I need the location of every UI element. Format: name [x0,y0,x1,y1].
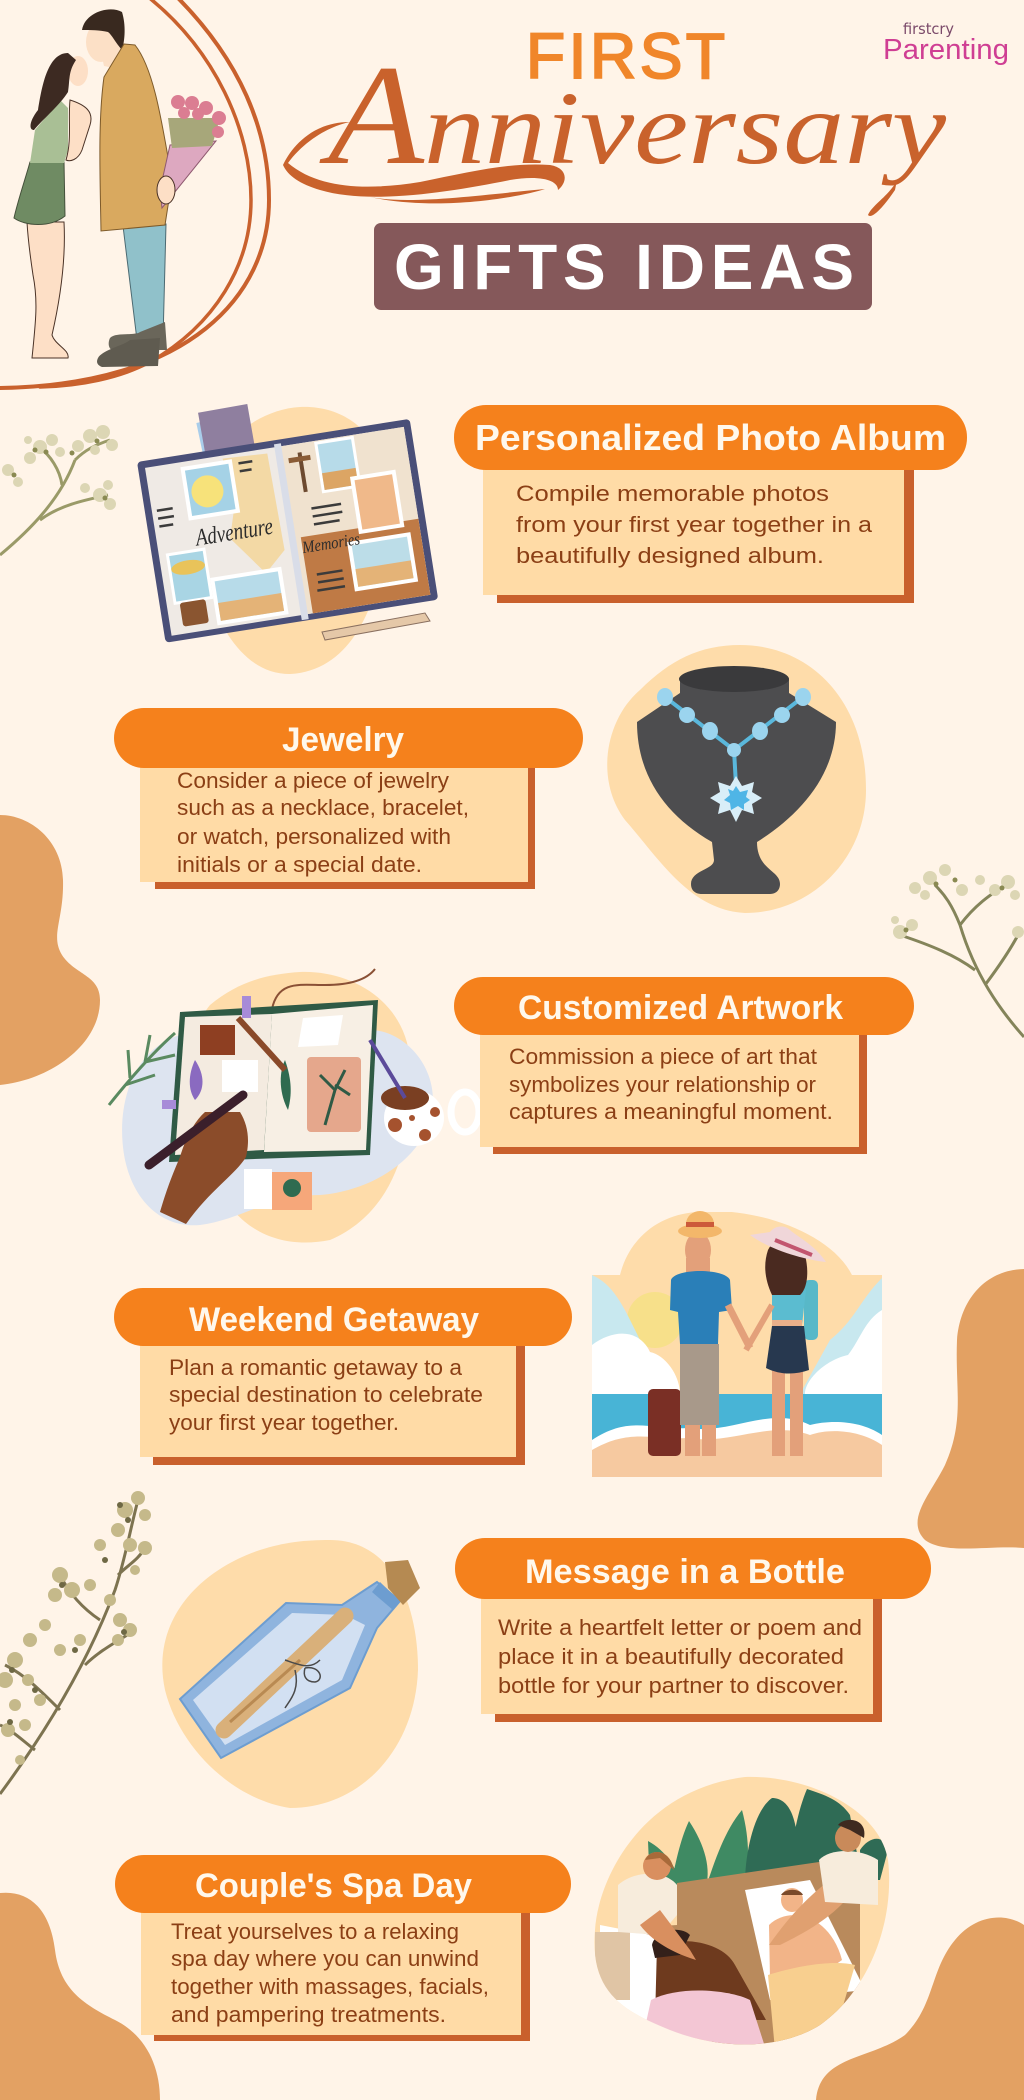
open book: Adventure [192,514,275,552]
open book [137,419,438,643]
item: Personalized Photo Album: from your first year together in a [516,512,873,537]
illustration: necklace on bust [607,645,866,913]
item: Weekend Getaway: special destination to celebrate [169,1382,483,1407]
card [480,1025,859,1147]
twig: lower left [0,1491,152,1794]
item: Message in a Bottle: bottle for your partner to discover. [498,1673,849,1698]
massage table [646,1862,860,2044]
card shadow [154,1905,530,2041]
illustration: couple's spa [590,1770,895,2055]
logo: firstcry parenting [883,20,1009,66]
item: Couple's Spa Day: together with massages, facials, [171,1974,489,1999]
decorative blob: bottom left [0,1893,160,2100]
card [140,755,528,882]
illustration: message in a bottle [162,1540,420,1808]
item: Jewelry: initials or a special date. [177,852,422,877]
logo: firstcry parenting: firstcry [903,20,954,38]
stationery cards [244,1169,272,1209]
heading pill [455,1538,931,1599]
twig: upper left [0,425,118,555]
card shadow [497,470,914,603]
bouquet [157,95,226,208]
item: Personalized Photo Album [454,405,967,603]
item: Customized Artwork: captures a meaningful moment. [509,1099,833,1124]
right therapist [769,1820,878,1945]
illustration: couple on beach [592,1211,882,1477]
illustration: sketchbook and hand [109,969,479,1243]
heading pill [454,405,967,470]
item: Jewelry [114,708,583,889]
plants [648,1789,888,1890]
woman [746,1226,826,1456]
card shadow [153,1336,525,1465]
card [483,460,904,595]
item: Personalized Photo Album: beautifully designed album. [516,543,824,568]
item: Couple's Spa Day [115,1855,571,2041]
heading: Personalized Photo Album [475,417,946,458]
item: Jewelry: or watch, personalized with [177,824,451,849]
open sketchbook [169,1000,378,1162]
item: Weekend Getaway: your first year together. [169,1410,399,1435]
heading: Customized Artwork [518,989,843,1027]
decorative blob: left middle [0,815,100,1085]
decorative blob: right middle [918,1269,1024,1549]
leaves [109,1033,175,1105]
heading pill [115,1855,571,1913]
decorative blob: bottom right [816,1917,1024,2100]
title: Anniversary script: A [319,36,425,194]
item: Couple's Spa Day: and pampering treatments. [171,2002,446,2027]
postcard [196,404,256,462]
description: Write a heartfelt letter or poem and [498,1615,862,1640]
heading: Couple's Spa Day [195,1867,472,1905]
card shadow [493,1025,867,1154]
heading: Jewelry [282,721,404,759]
heading pill [114,708,583,768]
item: Message in a Bottle [455,1538,931,1722]
item: Jewelry: such as a necklace, bracelet, [177,795,469,820]
mug [370,1040,479,1146]
logo: firstcry parenting: Parenting [883,34,1009,66]
twig: right [891,864,1024,1037]
man [82,9,172,367]
item: Customized Artwork [454,977,914,1154]
description: Compile memorable photos [516,481,829,506]
heading pill [114,1288,572,1346]
item: Couple's Spa Day: spa day where you can unwind [171,1946,479,1971]
item: Customized Artwork: symbolizes your relationship or [509,1072,816,1097]
item: Message in a Bottle: place it in a beautifully decorated [498,1644,844,1669]
title banner: GIFTS IDEAS: GIFTS IDEAS [394,231,854,303]
card [481,1590,873,1714]
ring arcs [0,0,269,388]
description: Plan a romantic getaway to a [169,1355,463,1380]
card shadow [155,760,535,889]
heading pill [454,977,914,1035]
title: Anniversary script [283,36,947,216]
right sheet and client [745,1880,865,2050]
suitcase [648,1389,681,1456]
description: Commission a piece of art that [509,1044,817,1069]
man [670,1211,750,1456]
description: Consider a piece of jewelry [177,768,449,793]
hand with pen [160,1112,248,1224]
woman [14,53,91,358]
item: Weekend Getaway [114,1288,572,1465]
left sheet and client [600,1925,766,2050]
description: Treat yourselves to a relaxing [171,1919,459,1944]
heading: Weekend Getaway [189,1301,479,1339]
heading: Message in a Bottle [525,1553,845,1591]
open book: Memories [300,529,362,557]
pen [322,613,430,640]
card shadow [495,1590,882,1722]
chain and beads [657,688,811,822]
left therapist [595,1852,696,2000]
title: FIRST: FIRST [526,20,725,92]
header illustration: couple with rings [0,0,269,388]
card [141,1905,521,2035]
title: Anniversary script: nniversary [424,71,947,186]
illustration: photo album [137,404,438,674]
card [140,1336,516,1457]
